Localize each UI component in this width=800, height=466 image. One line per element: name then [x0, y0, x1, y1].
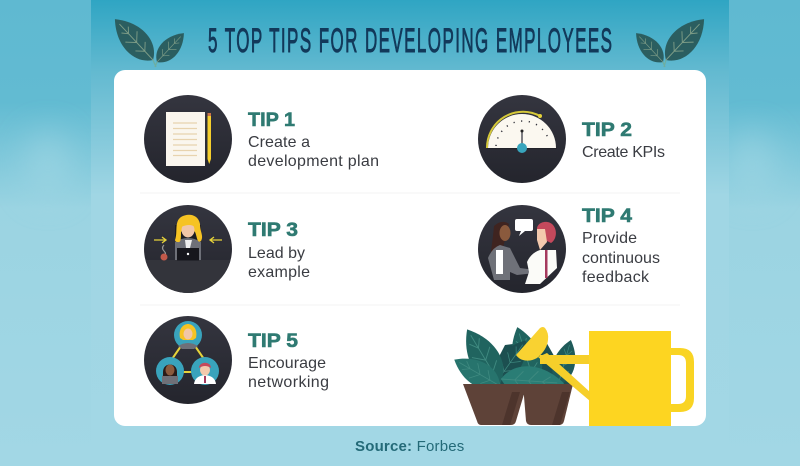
tip 1 text: Create a [248, 134, 310, 151]
illustration: plants and watering can [448, 322, 694, 426]
title: 5 TOP TIPS FOR DEVELOPING EMPLOYEES [208, 22, 612, 60]
tip 5 text: Encourage [248, 355, 326, 372]
tip 5 heading: TIP 5 [248, 331, 298, 352]
tip 5 text: networking [248, 374, 329, 391]
tip 1 text: development plan [248, 153, 379, 170]
tip 2 heading: TIP 2 [582, 120, 632, 141]
tip 4 text: feedback [582, 269, 650, 286]
tip 4 text: Provide [582, 230, 637, 247]
tip 4 heading: TIP 4 [582, 206, 632, 227]
plant pots [463, 384, 573, 425]
tip 5 [144, 316, 329, 404]
source line: Source: Forbes [355, 438, 465, 455]
tip 1 heading: TIP 1 [248, 110, 295, 131]
tip 4 [478, 205, 660, 293]
icon: network of people [144, 316, 232, 404]
watering can [516, 327, 694, 426]
icon: gauge [478, 95, 566, 183]
tip 2 text: Create KPIs [582, 144, 665, 161]
tip 3 heading: TIP 3 [248, 220, 298, 241]
center panel [91, 0, 729, 466]
icon: right leaves [629, 10, 714, 69]
icon: left leaves [105, 10, 191, 69]
tip 3 text: example [248, 264, 310, 281]
icon: leader at desk [144, 205, 232, 293]
icon: two people talking [478, 205, 566, 293]
plant leaves [448, 322, 581, 398]
icon: notepad and pencil [144, 95, 232, 183]
white card [114, 70, 706, 426]
tip 3 [144, 205, 310, 293]
tip 2 [478, 95, 665, 183]
tip 1 [144, 95, 379, 183]
tip 3 text: Lead by [248, 245, 305, 262]
tip 4 text: continuous [582, 250, 660, 267]
